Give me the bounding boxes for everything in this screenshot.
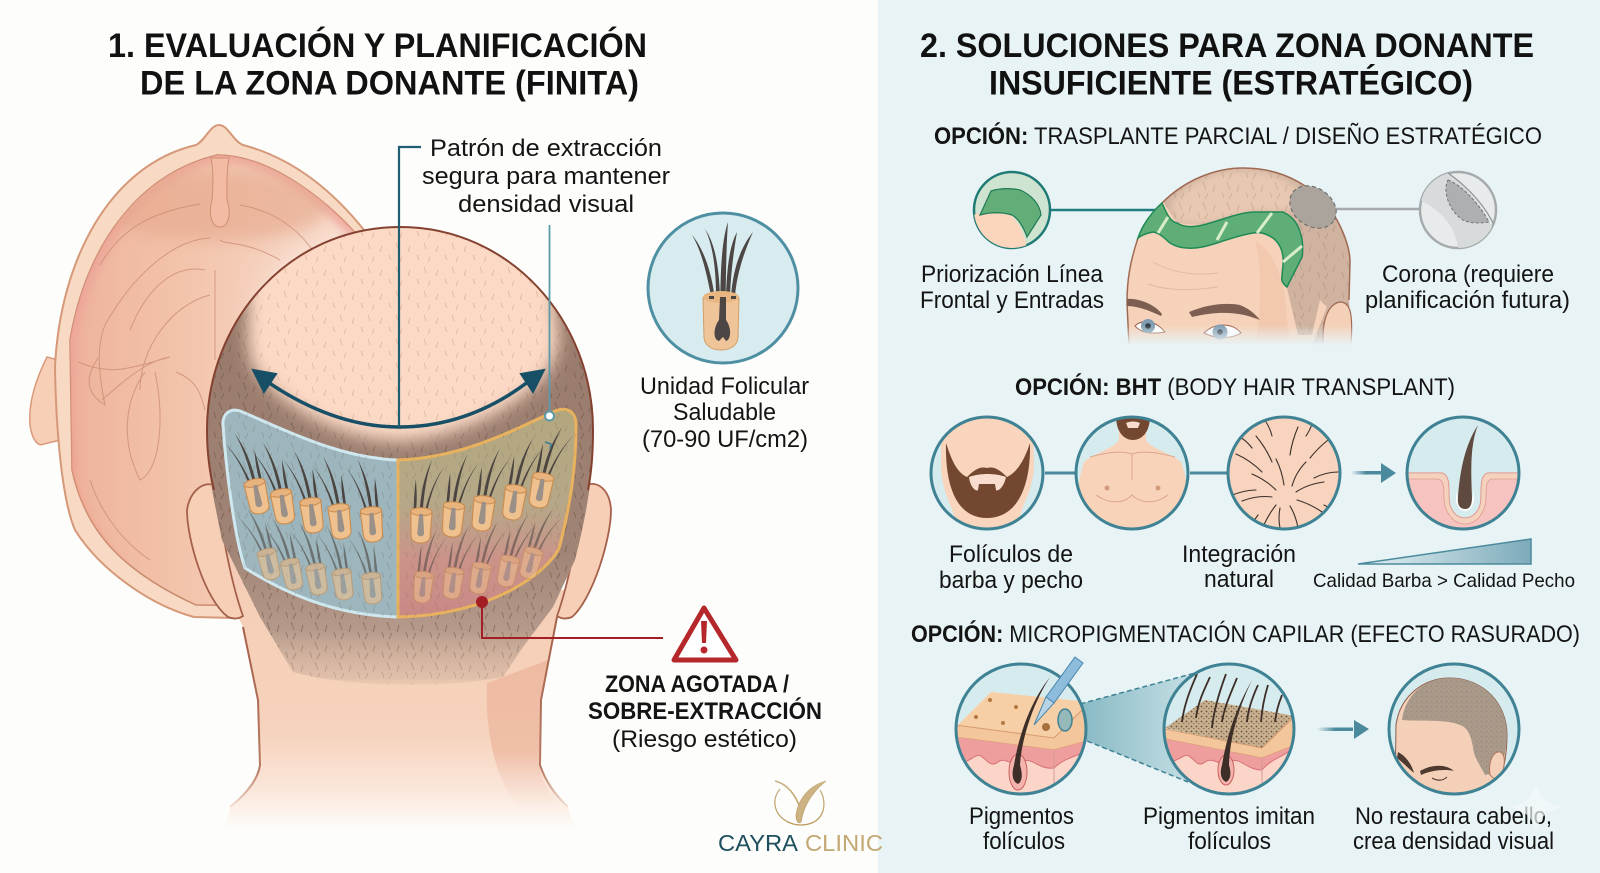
heading: section 1: DE LA ZONA DONANTE (FINITA) [140, 64, 639, 102]
text: pigments follicles [969, 803, 1074, 855]
arrow: pigment to result [1317, 720, 1369, 739]
text: crown label: Corona (requiere [1382, 261, 1554, 288]
text: extraction pattern label: segura para mantener [422, 163, 670, 190]
icon: follicle in skin circle [1406, 416, 1520, 530]
heading: option partial transplant: OPCIÓN: TRASPLANTE PARCIAL / DISEÑO ESTRATÉGICO [934, 122, 1542, 150]
heading: section 1: 1. EVALUACIÓN Y PLANIFICACIÓN [108, 27, 647, 65]
text: no hair restoration: No restaura cabello, [1355, 803, 1552, 830]
callout line: safe limit marker [545, 225, 554, 449]
icon: warning triangle [674, 608, 736, 660]
text: natural integration: Integración [1182, 541, 1296, 568]
text: depleted zone label: SOBRE-EXTRACCIÓN [588, 697, 822, 725]
icon: pigments close-up circle [1160, 664, 1295, 800]
heading: section 2: INSUFICIENTE (ESTRATÉGICO) [989, 64, 1473, 102]
text: frontal label: Priorización Línea [921, 261, 1104, 288]
icon: crown dashed zone [1289, 185, 1337, 229]
text: quality comparison: Calidad Barba > Calidad Pecho [1313, 570, 1575, 592]
icon: pigmentation needle [1034, 657, 1083, 725]
icon: frontal hairline circle [972, 170, 1052, 250]
veins [78, 204, 320, 560]
arrow: BHT to follicle [1351, 463, 1396, 483]
text: pigments imitate follicles [1143, 803, 1315, 855]
connector: frontal to head [1050, 209, 1160, 211]
text: no hair restoration [1353, 803, 1554, 855]
text: frontal label: Frontal y Entradas [920, 287, 1104, 314]
icon: sparkle watermark [1508, 782, 1564, 833]
text: pigments follicles: Pigmentos [969, 803, 1074, 830]
text: extraction pattern label: densidad visual [458, 191, 634, 218]
text: crown label [1365, 261, 1570, 314]
text: natural integration [1182, 541, 1296, 593]
text: pigments imitate follicles: Pigmentos imitan [1143, 803, 1315, 830]
text: natural integration: natural [1204, 566, 1274, 593]
callout line: depleted zone [476, 596, 663, 638]
connector: crown to head [1333, 208, 1421, 210]
panel: donor patch left healthy [223, 410, 398, 617]
icon: crown circle [1420, 172, 1497, 260]
icon: green hairline strip [1138, 203, 1303, 287]
icon: ear [1323, 302, 1352, 345]
text: frontal label [920, 261, 1104, 314]
heading: option BHT: OPCIÓN: BHT (BODY HAIR TRANSPLANT) [1015, 373, 1455, 401]
icon: logo leaves [775, 781, 826, 825]
heading: section 2 [920, 27, 1534, 102]
illustration: head front with hairline design [1126, 167, 1352, 344]
text: beard and chest follicles [939, 541, 1083, 594]
text: beard and chest follicles: Folículos de [949, 541, 1073, 568]
logo: Cayra Clinic: CAYRA [718, 830, 799, 856]
icon: magnification beam [1065, 673, 1195, 782]
panel: right background [878, 0, 1600, 873]
panel: donor patch right depleted [398, 409, 576, 617]
icon: healthy follicular unit [648, 213, 798, 363]
text: extraction pattern label [422, 135, 670, 218]
arrow: curved extraction pattern [253, 370, 544, 427]
text: extraction pattern label: Patrón de extracción [430, 135, 662, 162]
text: follicular unit label: (70-90 UF/cm2) [642, 426, 808, 453]
icon: right ear [557, 484, 611, 619]
chart: quality wedge [1358, 539, 1531, 564]
text: no hair restoration: crea densidad visual [1353, 828, 1554, 855]
illustration: neck [225, 590, 575, 830]
icon: beard circle [930, 415, 1044, 540]
icon: chest circle [1074, 416, 1190, 530]
illustration: open scalp top view [29, 124, 365, 619]
text: depleted zone label: (Riesgo estético) [612, 726, 797, 753]
text: follicular unit label [640, 373, 809, 453]
logo: Cayra Clinic [718, 781, 883, 856]
text: crown label: planificación futura) [1365, 287, 1570, 314]
logo: Cayra Clinic: CLINIC [805, 830, 883, 856]
icon: pigment skin section circle [955, 664, 1090, 800]
text: pigments imitate follicles: folículos [1188, 828, 1271, 855]
icon: eyebrows and eyes [1127, 299, 1260, 340]
icon: left ear [187, 484, 243, 619]
heading: section 2: 2. SOLUCIONES PARA ZONA DONANTE [920, 27, 1534, 65]
text: follicular unit label: Unidad Folicular [640, 373, 809, 400]
callout line: extraction pattern [399, 147, 421, 427]
illustration: back of head [200, 200, 600, 690]
icon: falx fissure [210, 158, 229, 227]
panel: left background [0, 0, 878, 873]
text: depleted zone label [588, 671, 822, 753]
text: follicular unit label: Saludable [673, 399, 776, 426]
icon: transplanted hair circle [1227, 416, 1341, 532]
connectors: BHT chain [1045, 472, 1228, 474]
heading: section 1 [108, 27, 647, 102]
text: pigments follicles: folículos [983, 828, 1065, 855]
icon: buzz cut head circle [1389, 664, 1519, 800]
text: beard and chest follicles: barba y pecho [939, 567, 1083, 594]
text: depleted zone label: ZONA AGOTADA / [605, 671, 789, 698]
